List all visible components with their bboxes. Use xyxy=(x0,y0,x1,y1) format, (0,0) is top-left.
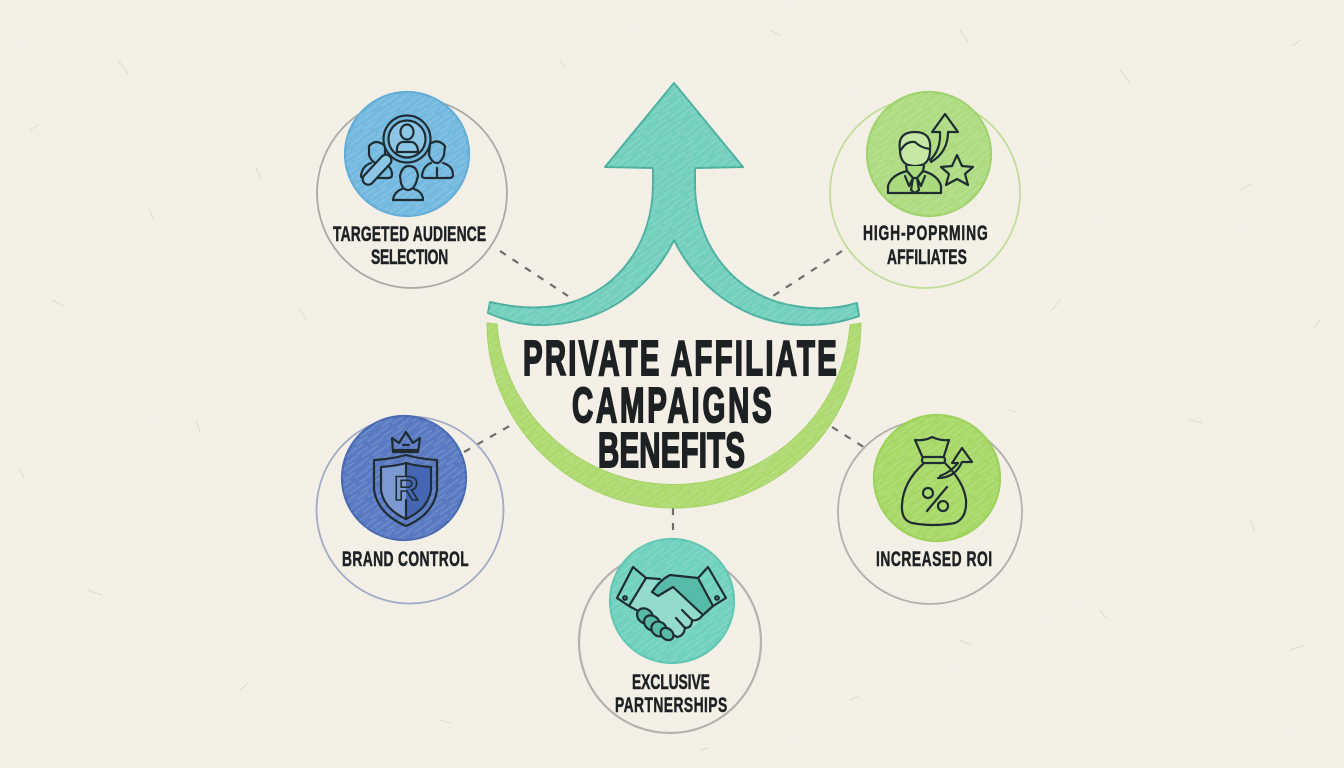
label: SELECTION xyxy=(371,245,448,269)
colour disc xyxy=(610,539,734,663)
title: CAMPAIGNS xyxy=(572,377,772,433)
icon: handshake xyxy=(617,567,726,643)
connector: brand control to centre xyxy=(464,424,513,452)
icon: crowned shield with R: R xyxy=(394,470,419,508)
colour disc xyxy=(342,416,466,540)
label: TARGETED AUDIENCE xyxy=(333,222,486,246)
colour disc xyxy=(874,415,1000,541)
label xyxy=(333,222,486,269)
bowl under the arrow xyxy=(487,323,861,508)
label xyxy=(615,670,727,717)
title: BENEFITS xyxy=(598,422,745,478)
label xyxy=(863,221,988,269)
title: PRIVATE AFFILIATE xyxy=(523,330,837,386)
connector: high-performing affiliates to centre xyxy=(773,251,842,296)
connector: increased ROI to centre xyxy=(832,427,870,451)
label: BRAND CONTROL xyxy=(342,547,469,571)
panel: exclusive partnerships xyxy=(579,539,761,733)
connector: targeted audience to centre xyxy=(500,251,568,296)
outline ring xyxy=(830,98,1020,288)
title xyxy=(523,330,837,478)
outline ring xyxy=(579,551,761,733)
label: INCREASED ROI xyxy=(876,547,992,571)
label: PARTNERSHIPS xyxy=(615,693,727,717)
icon: affiliate with arrow and star xyxy=(888,114,973,193)
outline ring xyxy=(317,98,507,288)
upward arrow xyxy=(488,83,859,325)
label: AFFILIATES xyxy=(887,245,967,269)
connector: exclusive partnerships to centre xyxy=(672,508,674,536)
icon: money bag with percent xyxy=(902,437,972,525)
panel: high-performing affiliates xyxy=(830,92,1020,288)
colour disc xyxy=(345,92,469,216)
outline ring xyxy=(316,416,504,604)
outline ring xyxy=(838,420,1022,604)
panel: targeted audience selection xyxy=(317,92,507,288)
label: EXCLUSIVE xyxy=(632,670,710,694)
panel: brand control xyxy=(316,416,504,604)
icon: audience under magnifier xyxy=(360,116,453,200)
icon: crowned shield with R xyxy=(374,432,437,526)
panel: increased ROI xyxy=(838,415,1022,604)
colour disc xyxy=(867,92,991,216)
label: HIGH-POPRMING xyxy=(863,221,988,245)
